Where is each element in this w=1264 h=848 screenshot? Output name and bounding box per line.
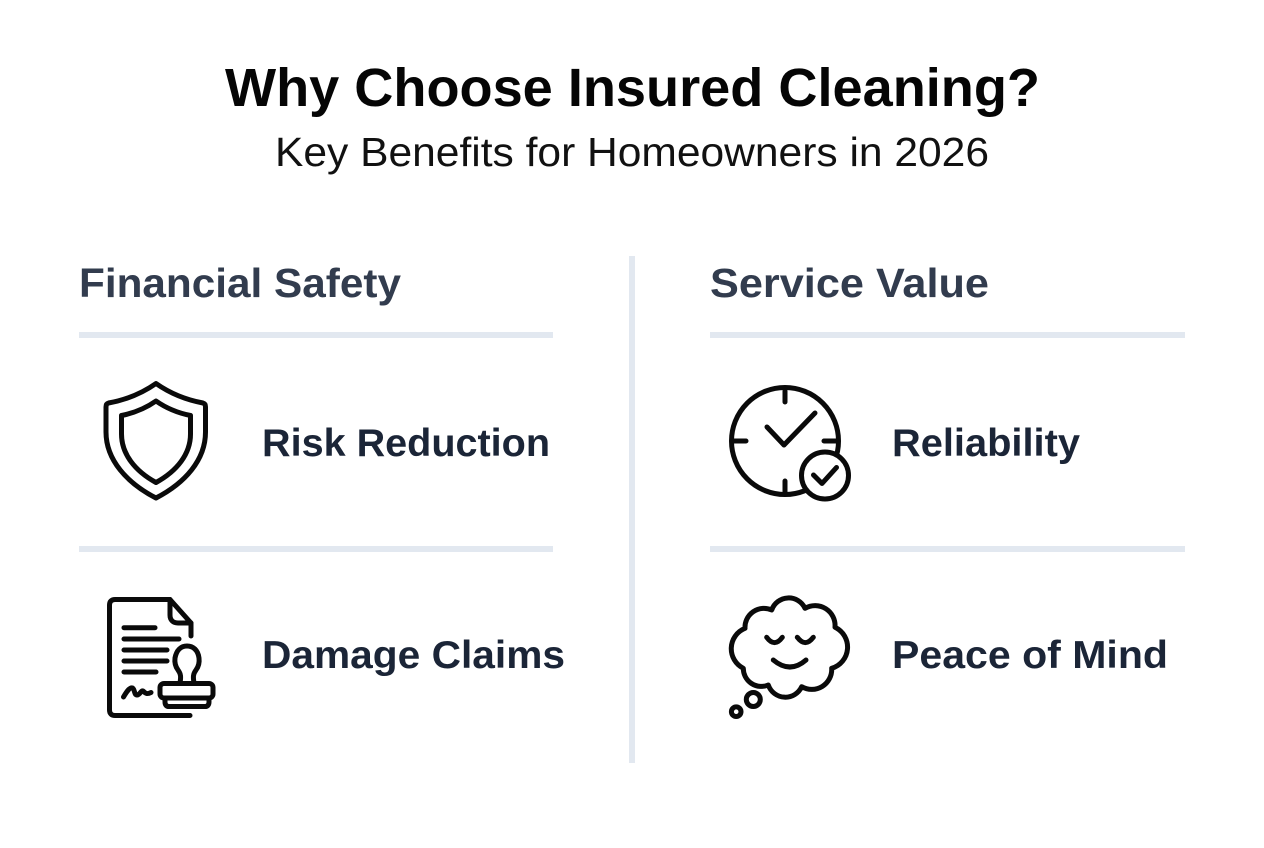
panel: financial safety xyxy=(79,260,565,716)
subtitle: Key Benefits for Homeowners in 2026 xyxy=(275,129,989,175)
icon: shield xyxy=(106,384,206,498)
icon: clock with check xyxy=(732,388,848,499)
icon: document with stamp xyxy=(110,600,213,716)
heading: financial safety: Financial Safety xyxy=(79,260,401,306)
label: reliability: Reliability xyxy=(892,422,1080,465)
title: Why Choose Insured Cleaning? xyxy=(225,58,1040,118)
heading: service value: Service Value xyxy=(710,260,989,306)
label: damage claims: Damage Claims xyxy=(262,634,565,677)
label: risk reduction: Risk Reduction xyxy=(262,422,550,465)
center divider xyxy=(629,256,635,763)
label: peace of mind: Peace of Mind xyxy=(892,634,1168,677)
panel: service value xyxy=(710,260,1185,716)
icon: thought cloud with calm face xyxy=(731,598,848,716)
